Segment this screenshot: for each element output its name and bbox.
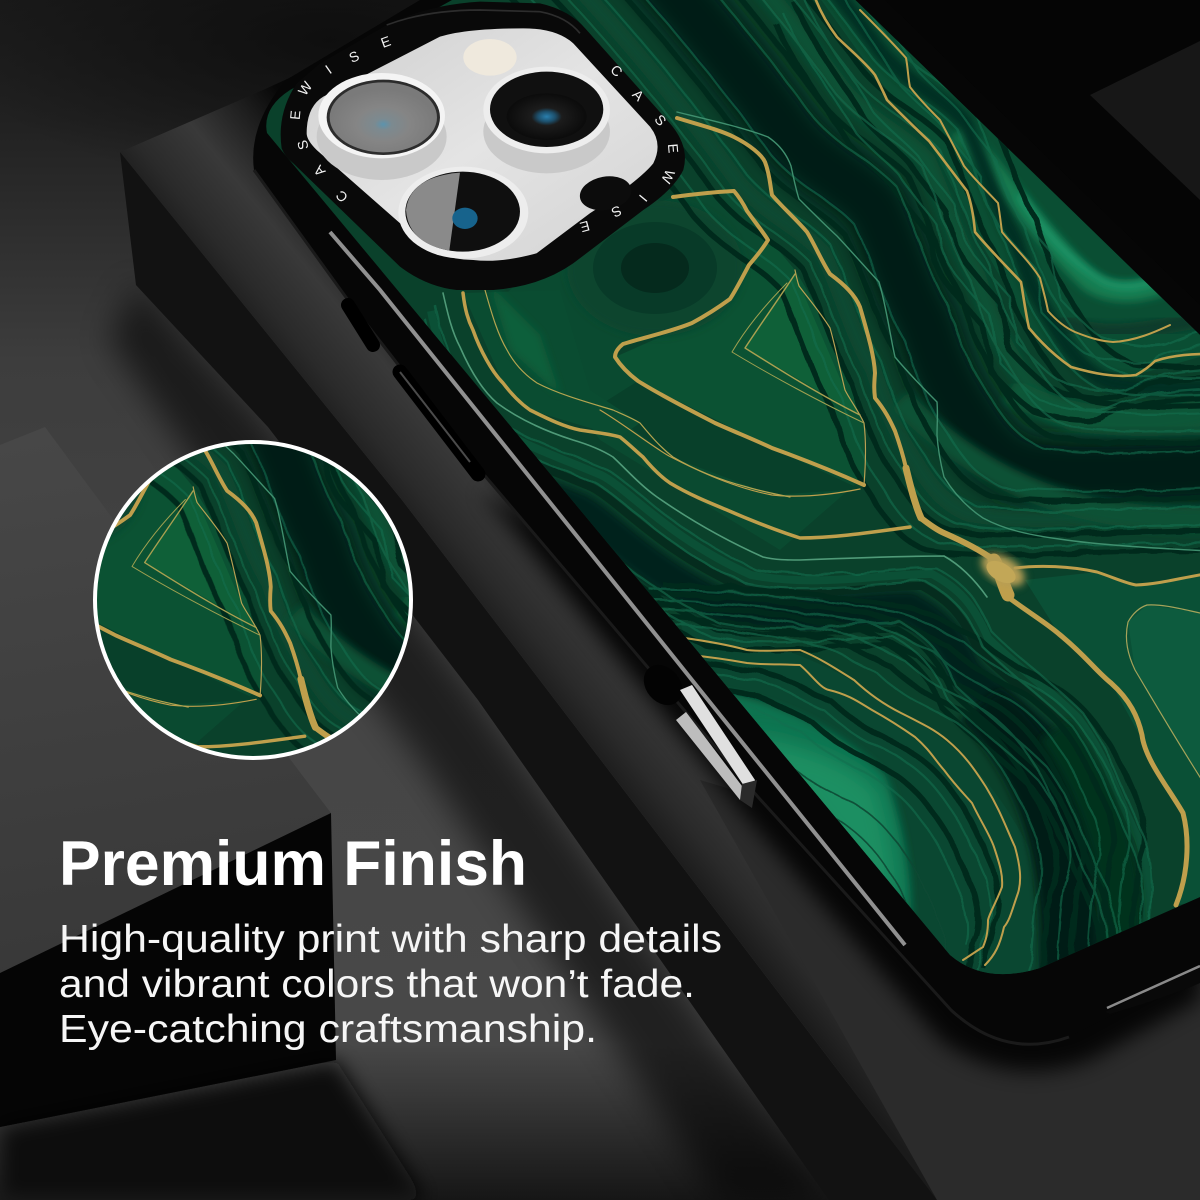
icon: charging port: [1105, 966, 1200, 1014]
bump ring: [281, 2, 685, 290]
brand text: A: [310, 162, 328, 180]
body text: and vibrant colors that won’t fade.: [59, 963, 695, 1006]
case rim: [254, 170, 1069, 1044]
body text: Eye-catching craftsmanship.: [59, 1008, 597, 1051]
brand text: W: [295, 78, 316, 98]
brand text: C: [607, 61, 626, 80]
brand text: S: [609, 202, 624, 221]
case shell: [253, 0, 1200, 1044]
brand text: E: [578, 218, 592, 236]
brand text: C: [332, 187, 351, 206]
detail magnifier circle: [93, 440, 413, 760]
brand text: A: [629, 86, 648, 104]
brand text: W: [658, 167, 678, 187]
camera module: [281, 2, 685, 290]
block: central plinth soft shadow: [110, 285, 829, 1200]
ring highlight: [387, 10, 580, 33]
block: central plinth front face: [120, 152, 937, 1200]
brand text: I: [322, 62, 335, 77]
lens: left: [317, 73, 447, 180]
phone case: [240, 0, 1200, 1071]
block: upper-right cube top: [1090, 41, 1200, 200]
brand text: E: [287, 110, 303, 120]
block: lower-left cube front: [0, 813, 336, 1127]
brand text: S: [651, 111, 670, 129]
brand text: [287, 33, 682, 236]
body text: [59, 918, 722, 1051]
icon: lidar hole: [577, 172, 634, 214]
brand text: E: [379, 33, 393, 51]
lens: right: [483, 67, 610, 173]
lens: bottom: [398, 167, 528, 259]
glossy case edge highlight: [330, 232, 905, 945]
background: dark top corner shading: [0, 0, 710, 190]
icon: side buttons: [348, 305, 757, 808]
brand text: I: [636, 192, 651, 205]
brand text: S: [294, 138, 312, 152]
body text: High-quality print with sharp details: [59, 918, 722, 961]
brand text: S: [346, 47, 362, 66]
title: Premium Finish: [59, 829, 527, 899]
screen: malachite artwork: [240, 0, 1200, 1003]
background: upper right black area: [850, 0, 1200, 700]
brand text: E: [665, 143, 682, 154]
block: lower-left cube top: [0, 427, 331, 973]
camera window: [307, 28, 658, 261]
case cast shadow: [480, 490, 1200, 1071]
block: cube floor shadow: [0, 1060, 425, 1200]
icon: flash: [463, 39, 517, 76]
